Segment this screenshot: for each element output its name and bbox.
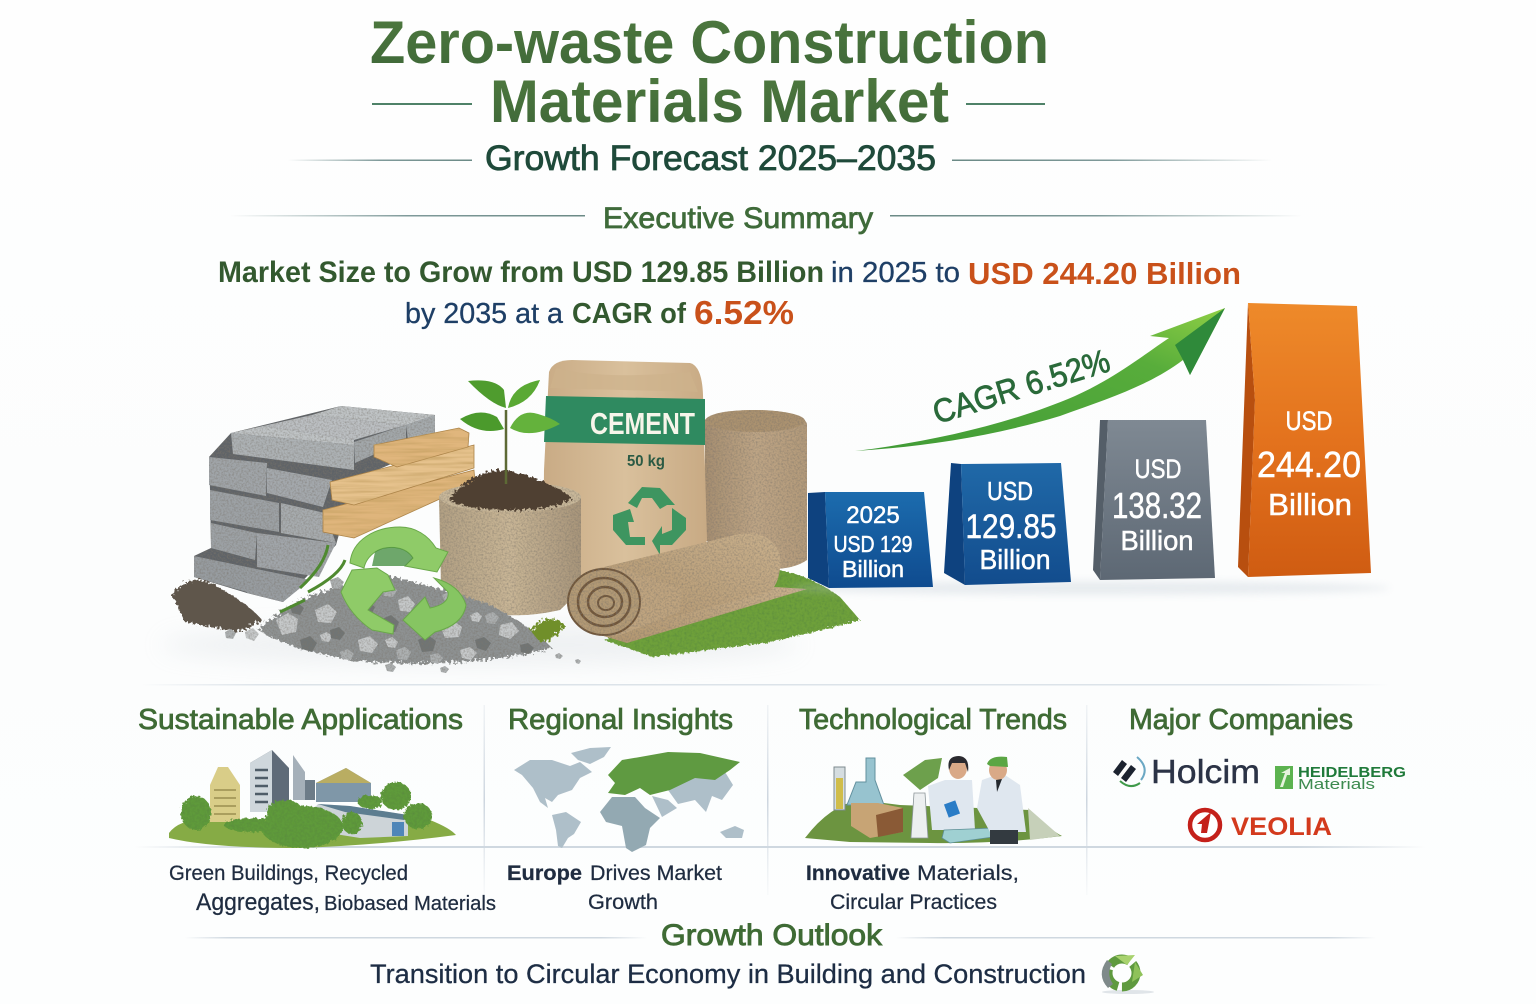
icon: circular economy (1102, 955, 1154, 994)
heading: executive summary: Executive Summary (603, 202, 873, 235)
description: technological trends: Materials, (917, 862, 1019, 885)
heading: major companies: Major Companies (1129, 704, 1353, 736)
title: Materials Market (490, 68, 949, 135)
logo: Heidelberg Materials: HEIDELBERG (1298, 765, 1406, 781)
label: CAGR 6.52%: CAGR 6.52% (928, 342, 1114, 431)
illustration: construction materials (160, 360, 860, 673)
bottom section dividers (135, 684, 1425, 895)
logo: Heidelberg Materials (1275, 765, 1406, 793)
rolled fibre mat (568, 534, 780, 636)
description: sustainable applications: Green Buildings, Recycled (169, 862, 408, 885)
heading: sustainable applications: Sustainable Applications (138, 704, 463, 736)
grass patch (604, 570, 860, 657)
bar chart: market size bars (790, 303, 1390, 595)
bar: 2025 USD 129 Billion: USD 129 (834, 531, 912, 557)
market size statement: USD 244.20 Billion (968, 256, 1241, 291)
subtitle: Growth Forecast 2025–2035 (485, 139, 936, 178)
concrete bricks (194, 406, 435, 602)
bar: USD 138.32 Billion: Billion (1120, 525, 1194, 556)
logo: Veolia: VEOLIA (1231, 813, 1332, 841)
description: regional insights: Drives Market (590, 862, 722, 885)
arrow: growth trend (855, 308, 1225, 451)
icon: scientists with materials (805, 756, 1062, 844)
description: sustainable applications: Biobased Materials (324, 893, 496, 915)
plant seedling (460, 380, 560, 484)
market size statement: in 2025 to (831, 257, 960, 289)
world map (514, 747, 744, 852)
icon: green city (169, 750, 456, 848)
logo: Holcim (1113, 753, 1260, 790)
market size statement: by 2035 at a (405, 298, 564, 330)
gravel pile (225, 545, 581, 673)
outlook statement: Transition to Circular Economy in Building and Construction (370, 959, 1086, 989)
panel: major companies (1113, 704, 1406, 841)
description: technological trends: Innovative (806, 862, 910, 885)
market size statement (218, 256, 1241, 331)
market size statement: Market Size to Grow from USD 129.85 Billion (218, 256, 824, 289)
description: technological trends (806, 862, 1019, 914)
icon: bag recycling mark (613, 487, 686, 555)
bar: USD 138.32 Billion: 138.32 (1112, 485, 1202, 526)
heading: technological trends: Technological Trends (799, 704, 1067, 736)
cement bag (543, 360, 707, 580)
panel: technological trends (799, 704, 1067, 914)
bar: USD 244.20 Billion: 244.20 (1257, 444, 1361, 485)
heading: growth outlook: Growth Outlook (661, 919, 883, 952)
bar: USD 138.32 Billion: USD (1134, 454, 1182, 484)
title (370, 9, 1049, 135)
panel: sustainable applications (138, 704, 496, 916)
panel: regional insights (507, 704, 744, 914)
description: technological trends: Circular Practices (830, 891, 997, 914)
flat fibre mat (590, 587, 807, 643)
cement bag: CEMENT (590, 406, 695, 441)
bar: 2025 USD 129 Billion (808, 492, 933, 588)
soil pile (172, 580, 262, 632)
heading: regional insights: Regional Insights (508, 704, 733, 736)
bar: USD 129.85 Billion: Billion (980, 544, 1050, 575)
description: regional insights: Growth (588, 891, 658, 914)
logo: Holcim: Holcim (1151, 753, 1260, 790)
description: sustainable applications (169, 862, 496, 916)
market size statement: CAGR of (572, 298, 686, 330)
wooden planks (323, 428, 475, 538)
icon: large recycling arrows (341, 527, 466, 640)
logo: Heidelberg Materials: Materials (1298, 776, 1375, 793)
cement bag: 50 kg (627, 453, 665, 470)
bar: 2025 USD 129 Billion: 2025 (846, 502, 900, 529)
bar: USD 244.20 Billion: Billion (1268, 487, 1352, 522)
bar: USD 244.20 Billion (1238, 303, 1371, 577)
bar: USD 129.85 Billion (944, 463, 1071, 585)
bar: 2025 USD 129 Billion: Billion (842, 556, 904, 582)
bar: USD 129.85 Billion: 129.85 (966, 508, 1056, 546)
fibre insulation roll, upright (705, 410, 807, 569)
bar: USD 244.20 Billion: USD (1286, 406, 1332, 436)
bar: USD 129.85 Billion: USD (987, 476, 1033, 506)
description: regional insights (507, 862, 722, 914)
concrete pot with soil (439, 380, 581, 615)
logo: Veolia (1190, 810, 1332, 841)
market size statement: 6.52% (694, 294, 794, 331)
description: regional insights: Europe (507, 862, 582, 885)
description: sustainable applications: Aggregates, (196, 889, 320, 916)
bar: USD 138.32 Billion (1093, 420, 1215, 580)
title: Zero-waste Construction (370, 9, 1049, 76)
